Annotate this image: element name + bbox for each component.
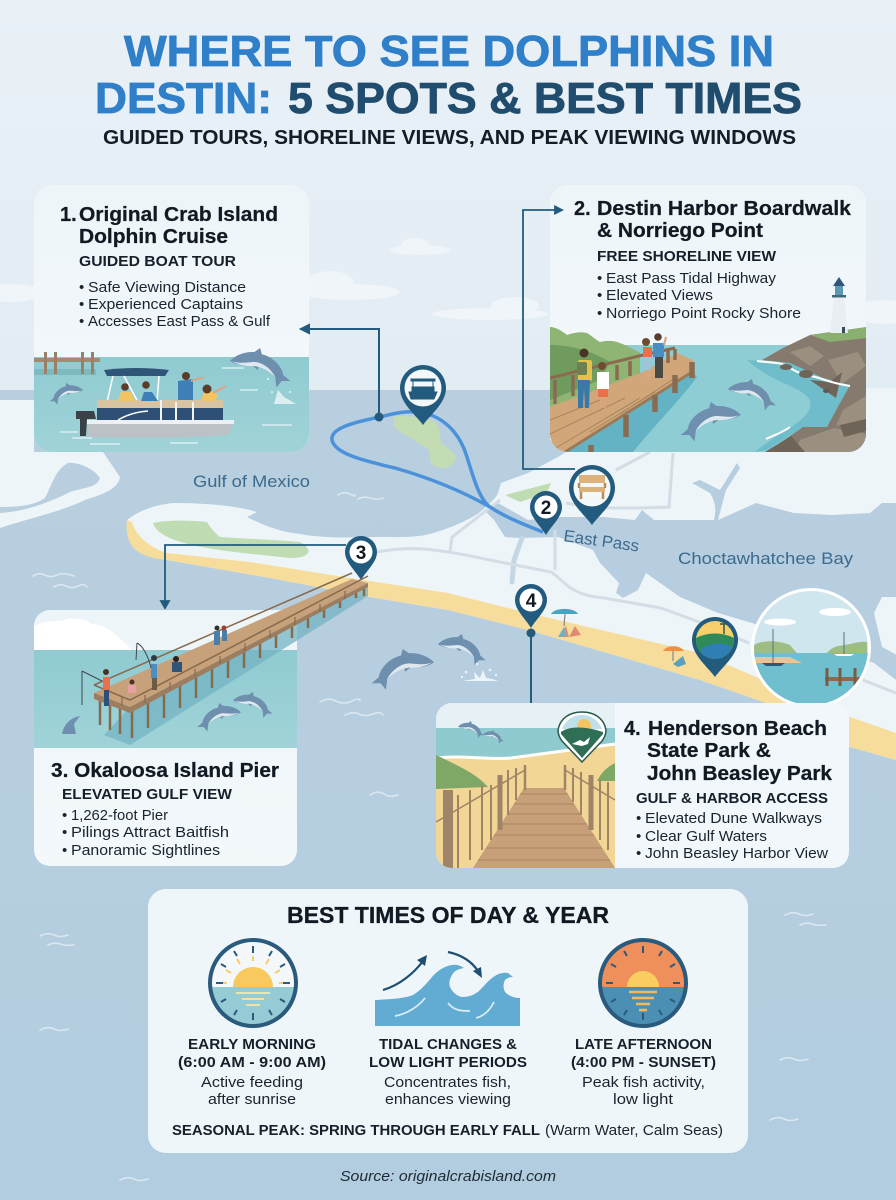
map labels: [193, 473, 854, 568]
column: tidal changes: [369, 1037, 527, 1108]
panel: card 1 Original Crab Island Dolphin Cruise: [34, 185, 309, 452]
card 4 bullets: •: [636, 810, 641, 827]
column: early morning: (6:00 AM - 9:00 AM): [178, 1055, 326, 1071]
connector: pin to card 3: [161, 545, 346, 608]
card 3 bullets: [62, 807, 229, 859]
icon: tidal wave: [375, 952, 520, 1026]
column: tidal changes: TIDAL CHANGES &: [379, 1037, 518, 1053]
panel: card 4 Henderson Beach: John Beasley Park: [647, 763, 833, 785]
card 4 bullets: •: [636, 828, 641, 845]
panel: card 2 Destin Harbor Boardwalk: & Norriego Point: [597, 220, 763, 242]
pin: harbor park: [692, 617, 738, 677]
card 2 bullets: Norriego Point Rocky Shore: [606, 305, 801, 322]
beach band: [127, 520, 896, 760]
beach umbrellas: [551, 609, 686, 667]
card 3 bullets: •: [62, 807, 67, 824]
column: early morning: after sunrise: [208, 1092, 296, 1108]
card 3 bullets: 1,262-foot Pier: [71, 807, 168, 824]
panel: card 2 Destin Harbor Boardwalk: [550, 185, 867, 452]
dolphins: open water: [372, 634, 498, 690]
card 1 scene: pontoon boat and dolphins: [34, 348, 309, 452]
card 2 scene: boardwalk, lighthouse, dolphins: [550, 277, 867, 452]
green parks: [153, 521, 309, 558]
bay and east pass: [484, 463, 896, 680]
panel: card 3 Okaloosa Island Pier: [34, 573, 368, 866]
map: coastline and land: [0, 388, 896, 760]
seasonal peak: SEASONAL PEAK: SPRING THROUGH EARLY FALL: [172, 1123, 540, 1139]
pin: number 3: 3: [356, 543, 366, 564]
card 4 bullets: Clear Gulf Waters: [645, 828, 767, 845]
seasonal peak: [172, 1123, 723, 1139]
pin: number 3: [345, 536, 377, 580]
card 3 bullets: •: [62, 824, 67, 841]
connector: pin to card 4: [528, 630, 534, 703]
card 1 bullets: •: [79, 296, 84, 313]
panel: card 4 Henderson Beach: Henderson Beach: [648, 718, 827, 740]
panel: card 2 Destin Harbor Boardwalk: Destin Harbor Boardwalk: [597, 198, 852, 220]
title: DESTIN:: [95, 74, 272, 123]
best times heading: BEST TIMES OF DAY & YEAR: [287, 902, 609, 928]
card 1 bullets: •: [79, 313, 84, 330]
column: early morning: [178, 1037, 326, 1108]
column: early morning: Active feeding: [201, 1075, 303, 1091]
column: late afternoon: [571, 1037, 716, 1108]
subtitle: GUIDED TOURS, SHORELINE VIEWS, AND PEAK VIEWING WINDOWS: [103, 126, 796, 149]
pin: number 2: [530, 491, 562, 535]
column: late afternoon: low light: [613, 1092, 673, 1108]
card 2 heading: 2.: [574, 198, 591, 220]
card 4 heading: 4.: [624, 718, 641, 740]
panel: best times of day and year: [148, 889, 748, 1153]
card 1 subheading: GUIDED BOAT TOUR: [79, 253, 236, 270]
panel: card 4 Henderson Beach: [436, 703, 849, 868]
title: [95, 27, 802, 123]
column: early morning: EARLY MORNING: [188, 1037, 316, 1053]
column: late afternoon: LATE AFTERNOON: [575, 1037, 712, 1053]
column: tidal changes: enhances viewing: [385, 1092, 511, 1108]
card 4 bullets: John Beasley Harbor View: [645, 845, 828, 862]
card 1 heading: 1.: [60, 204, 77, 226]
column: tidal changes: Concentrates fish,: [384, 1075, 511, 1091]
card 3 scene: [34, 618, 297, 748]
card 2 bullets: •: [597, 305, 602, 322]
card 1 bullets: •: [79, 279, 84, 296]
map labels: Gulf of Mexico: [193, 473, 310, 491]
card 4 bullets: Elevated Dune Walkways: [645, 810, 822, 827]
title: 5 SPOTS & BEST TIMES: [288, 74, 802, 123]
card 2 bullets: •: [597, 270, 602, 287]
card 3 heading: 3. Okaloosa Island Pier: [51, 760, 279, 782]
sea wavelets: [33, 493, 826, 1180]
icon: early morning clock: [205, 940, 301, 1032]
icon: late afternoon clock: [600, 940, 686, 1033]
connector: pin to card 1: [301, 325, 382, 420]
card 4 bullets: [636, 810, 828, 862]
pin: number 4: 4: [526, 591, 537, 612]
seasonal peak: (Warm Water, Calm Seas): [545, 1123, 723, 1139]
pin: boat: [400, 365, 446, 425]
card 2 bullets: East Pass Tidal Highway: [606, 270, 777, 287]
card 4 scene: [436, 703, 615, 868]
card 3 bullets: Panoramic Sightlines: [71, 842, 220, 859]
card 2 bullets: Elevated Views: [606, 287, 713, 304]
map labels: East Pass: [562, 527, 640, 556]
connector: pin to card 2: [523, 206, 575, 469]
boat route: [332, 412, 543, 532]
card 1 bullets: [79, 279, 271, 330]
visitors on boardwalk: [577, 333, 666, 408]
panel: card 1 Original Crab Island Dolphin Cruise: Dolphin Cruise: [79, 226, 228, 248]
pin: number 2: 2: [541, 498, 551, 519]
pin: number 4: [515, 584, 547, 628]
card 1 bullets: Accesses East Pass & Gulf: [88, 313, 271, 330]
pier: [82, 573, 368, 745]
column: late afternoon: Peak fish activity,: [582, 1075, 705, 1091]
card 1 bullets: Safe Viewing Distance: [88, 279, 246, 296]
source line: Source: originalcrabisland.com: [340, 1169, 556, 1185]
card 2 bullets: [597, 270, 801, 322]
anglers: [82, 626, 227, 706]
card 4 bullets: •: [636, 845, 641, 862]
column: late afternoon: (4:00 PM - SUNSET): [571, 1055, 716, 1071]
inset: harbor view: [751, 588, 871, 703]
card 3 subheading: ELEVATED GULF VIEW: [62, 786, 233, 803]
card 3 bullets: Pilings Attract Baitfish: [71, 824, 229, 841]
column: tidal changes: LOW LIGHT PERIODS: [369, 1055, 527, 1071]
panel: card 4 Henderson Beach: State Park &: [647, 740, 771, 762]
panel: card 1 Original Crab Island Dolphin Cruise: Original Crab Island: [79, 204, 278, 226]
card 3 bullets: •: [62, 842, 67, 859]
pin: bench: [569, 465, 615, 525]
card 1 bullets: Experienced Captains: [88, 296, 243, 313]
card 2 bullets: •: [597, 287, 602, 304]
title: WHERE TO SEE DOLPHINS IN: [124, 27, 774, 76]
badge: [558, 712, 606, 762]
roads: [376, 452, 896, 693]
card 2 subheading: FREE SHORELINE VIEW: [597, 248, 777, 265]
card 4 subheading: GULF & HARBOR ACCESS: [636, 790, 828, 807]
map labels: Choctawhatchee Bay: [678, 549, 854, 568]
